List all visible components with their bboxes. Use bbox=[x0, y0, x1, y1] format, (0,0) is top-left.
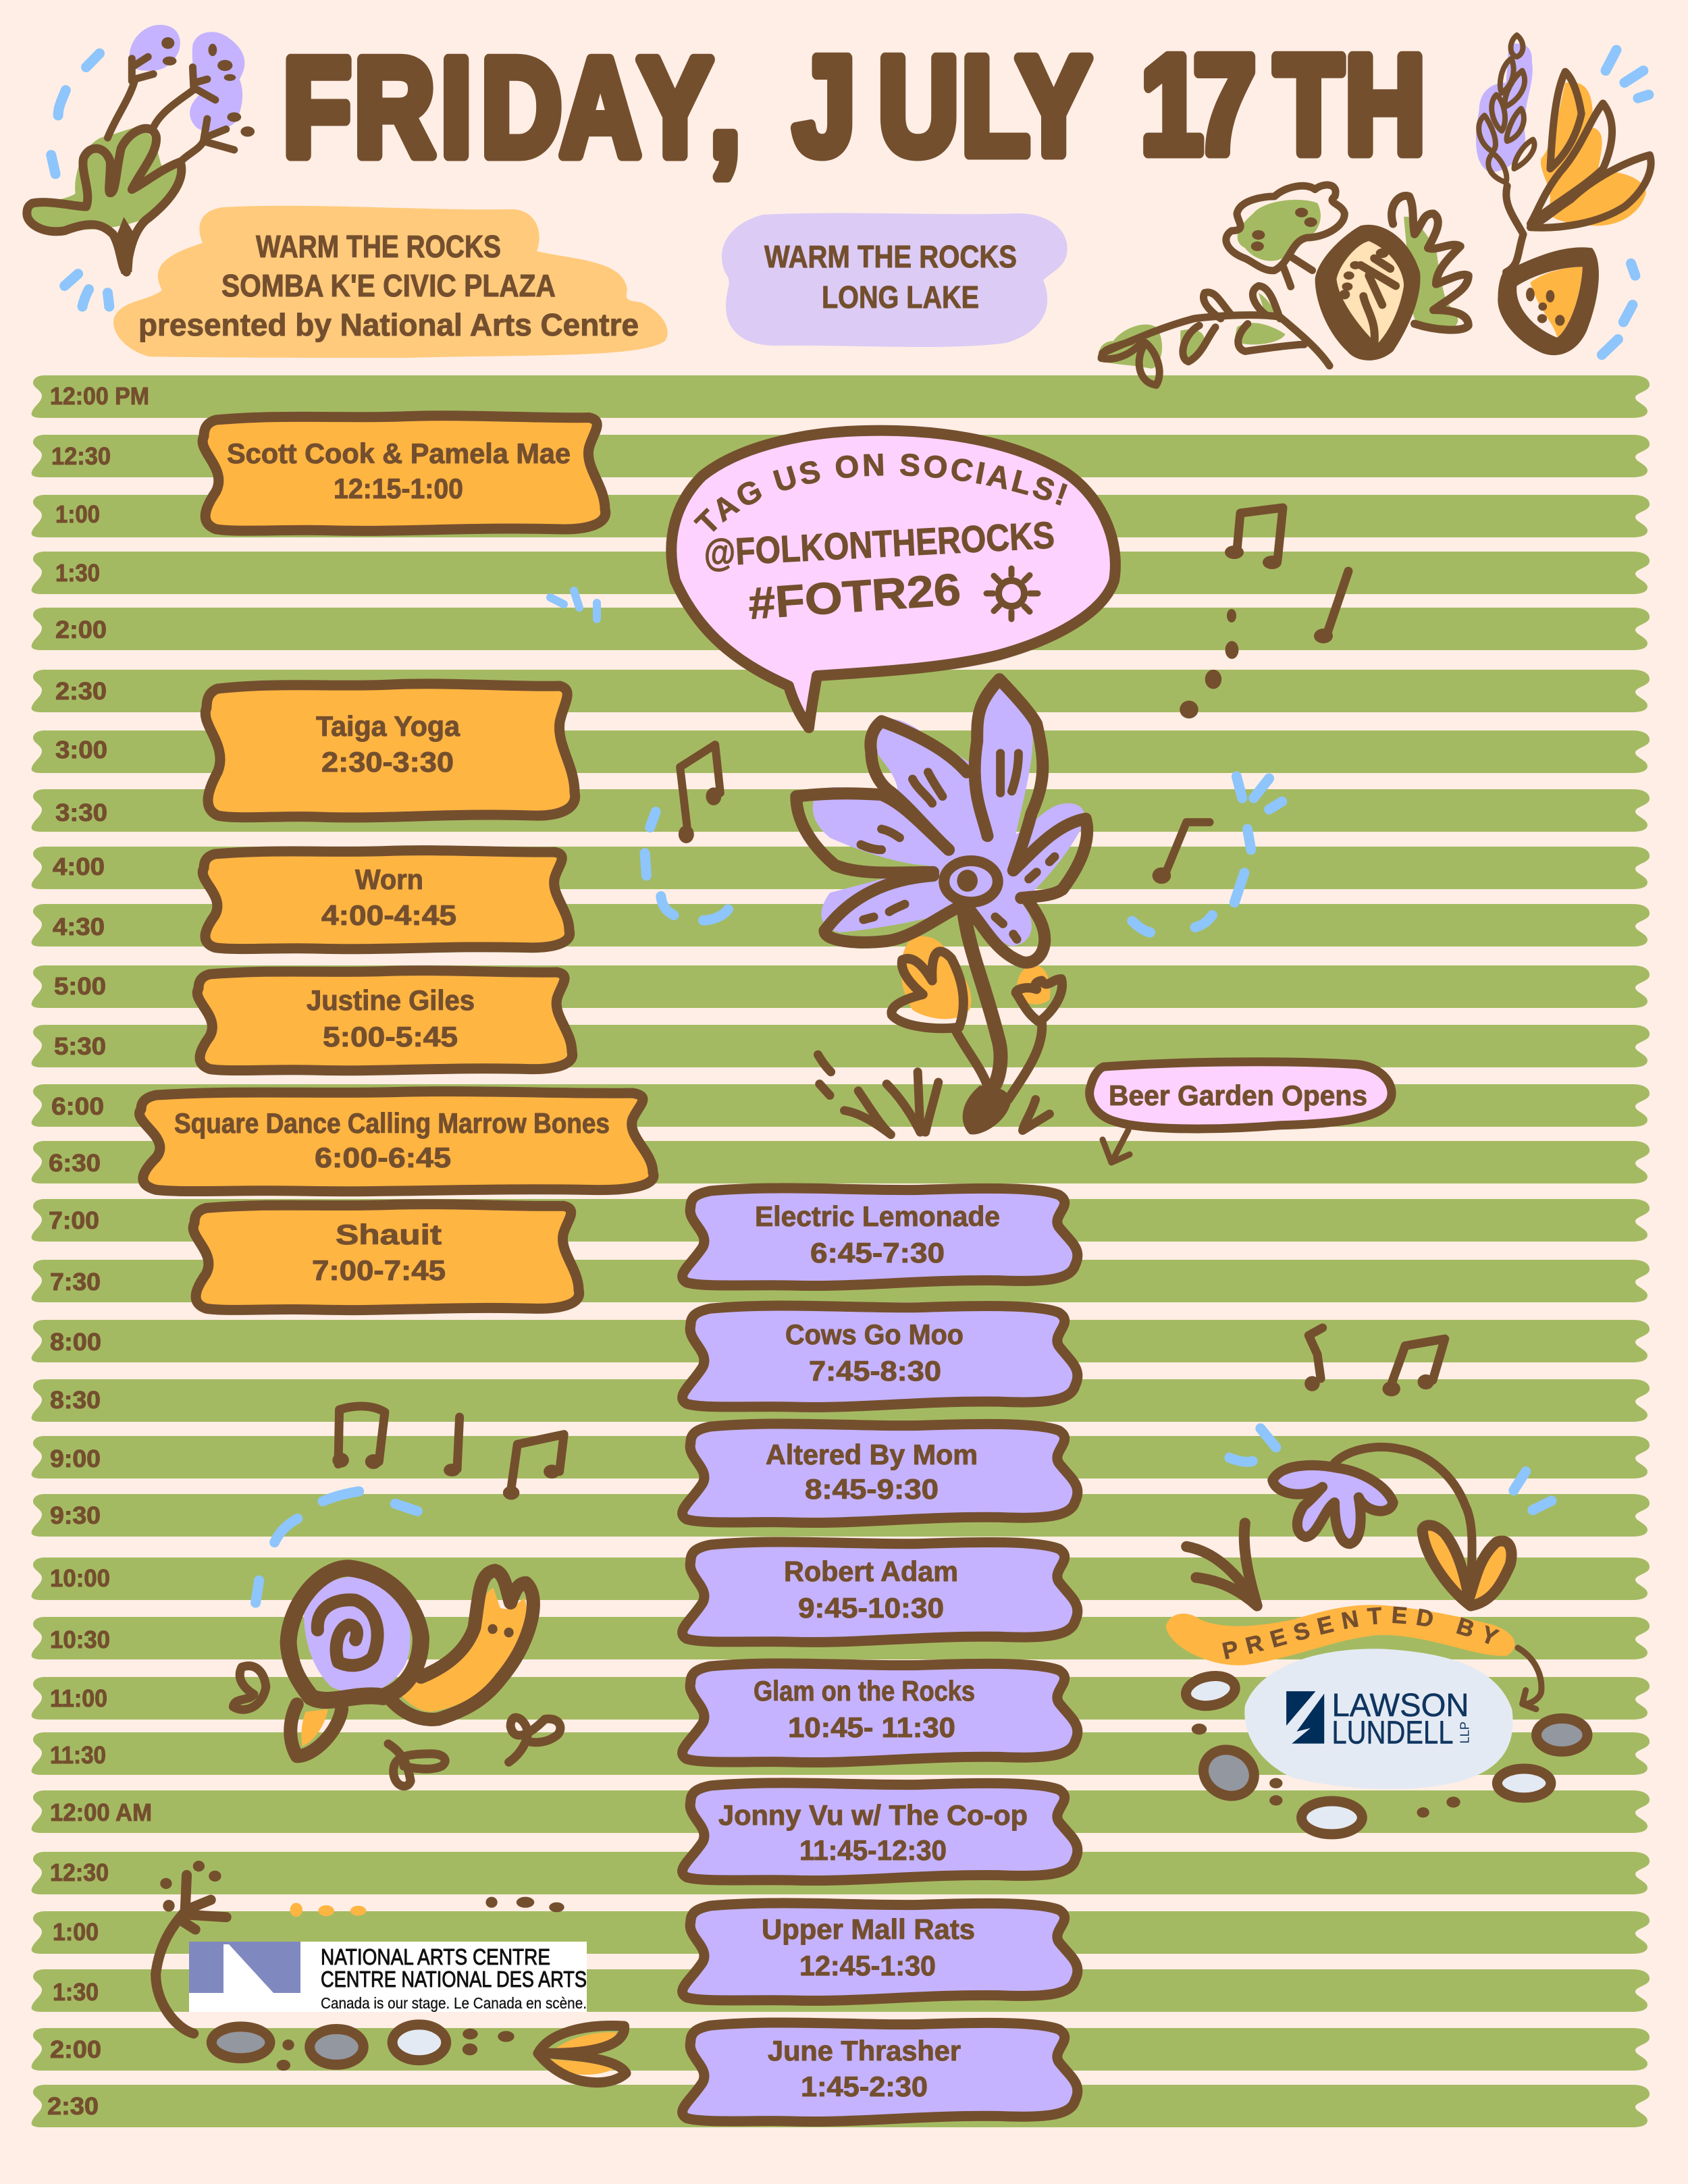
time axis labels: 8:00 bbox=[50, 1328, 101, 1356]
event: Electric Lemonade: 6:45-7:30 bbox=[810, 1237, 945, 1269]
icon: blue sparkle near bubble bbox=[550, 591, 597, 619]
time axis labels: 4:00 bbox=[53, 853, 105, 880]
event: Cows Go Moo: 7:45-8:30 bbox=[809, 1355, 941, 1387]
time axis labels: 5:00 bbox=[54, 972, 106, 1000]
event: Taiga Yoga: 2:30-3:30 bbox=[321, 746, 454, 778]
logo: Lawson Lundell presented by bbox=[1165, 1605, 1592, 1839]
time axis labels: 12:00 PM bbox=[50, 382, 149, 410]
logo: National Arts Centre: NATIONAL ARTS CENTRE bbox=[321, 1944, 550, 1969]
event: June Thrasher: June Thrasher bbox=[768, 2035, 961, 2067]
icon: music notes upper right bbox=[1225, 508, 1348, 643]
time axis labels: 10:00 bbox=[50, 1564, 110, 1592]
panel: Long Lake stage heading: WARM THE ROCKS bbox=[764, 239, 1017, 274]
schedule stripes background bbox=[32, 375, 1650, 2127]
time axis labels: 2:00 bbox=[50, 2035, 101, 2063]
time axis labels: 11:00 bbox=[50, 1684, 107, 1712]
sponsor decoration: branch, stones, leaf bbox=[156, 1861, 626, 2083]
logo: National Arts Centre: Canada is our stage. Le Canada en scène. bbox=[321, 1994, 587, 2012]
callout: social media speech bubble: #FOTR26 bbox=[747, 564, 962, 629]
event: Upper Mall Rats: Upper Mall Rats bbox=[762, 1913, 975, 1945]
time axis labels: 1:00 bbox=[55, 500, 100, 528]
icon: sun bbox=[986, 568, 1038, 619]
time axis labels: 3:00 bbox=[55, 736, 107, 764]
time axis labels: 8:30 bbox=[50, 1386, 101, 1414]
event: Scott Cook & Pamela Mae: 12:15-1:00 bbox=[334, 473, 463, 504]
event: Shauit: 7:00-7:45 bbox=[312, 1254, 446, 1286]
event: Justine Giles: Justine Giles bbox=[307, 984, 475, 1016]
event: Taiga Yoga: Taiga Yoga bbox=[316, 710, 460, 742]
panel: Somba K'e stage heading bbox=[113, 206, 668, 358]
event: Glam on the Rocks bbox=[683, 1663, 1078, 1762]
event: Worn: Worn bbox=[355, 863, 423, 895]
time axis labels: 1:30 bbox=[53, 1978, 99, 2006]
panel: Long Lake stage heading: LONG LAKE bbox=[822, 279, 979, 315]
event: Glam on the Rocks: Glam on the Rocks bbox=[754, 1675, 975, 1707]
callout: social media speech bubble: @FOLKONTHEROCKS bbox=[703, 513, 1055, 575]
time axis labels: 10:30 bbox=[50, 1626, 110, 1653]
event: Altered By Mom: 8:45-9:30 bbox=[805, 1473, 939, 1505]
event: Glam on the Rocks: 10:45- 11:30 bbox=[788, 1711, 955, 1743]
title: JULY bbox=[793, 28, 1091, 184]
title: FRIDAY, bbox=[283, 29, 741, 185]
event: Electric Lemonade bbox=[683, 1188, 1078, 1286]
event: Upper Mall Rats: 12:45-1:30 bbox=[799, 1950, 936, 1981]
time axis labels: 11:30 bbox=[50, 1741, 106, 1769]
event: June Thrasher: 1:45-2:30 bbox=[801, 2071, 928, 2102]
time axis labels: 12:30 bbox=[51, 442, 111, 470]
event: June Thrasher bbox=[683, 2023, 1078, 2121]
event: Shauit: Shauit bbox=[336, 1219, 442, 1250]
time axis labels: 6:00 bbox=[51, 1092, 104, 1120]
time axis labels: 2:00 bbox=[55, 616, 107, 643]
icon: drooping flower, arrows and music notes bbox=[1186, 1328, 1552, 1606]
event: Robert Adam bbox=[683, 1542, 1078, 1642]
time axis labels: 1:00 bbox=[53, 1918, 99, 1946]
callout: Beer Garden Opens bbox=[1090, 1062, 1392, 1163]
event: Cows Go Moo: Cows Go Moo bbox=[785, 1319, 964, 1350]
icon: main lilac flower with music notes bbox=[645, 641, 1282, 1135]
time axis labels: 6:30 bbox=[49, 1149, 101, 1177]
panel: Somba K'e stage heading: WARM THE ROCKS bbox=[256, 229, 501, 264]
time axis labels: 9:30 bbox=[50, 1501, 101, 1529]
event: Worn: 4:00-4:45 bbox=[321, 899, 456, 931]
event: Square Dance Calling Marrow Bones bbox=[140, 1092, 654, 1192]
logo: Lawson Lundell presented by: LUNDELL bbox=[1331, 1715, 1454, 1751]
event: Robert Adam: 9:45-10:30 bbox=[798, 1592, 944, 1624]
time axis labels: 7:30 bbox=[50, 1268, 101, 1296]
event: Altered By Mom: Altered By Mom bbox=[766, 1439, 978, 1470]
title bbox=[283, 26, 1425, 185]
time axis labels: 9:00 bbox=[50, 1445, 101, 1472]
event: Altered By Mom bbox=[683, 1424, 1078, 1522]
event: Square Dance Calling Marrow Bones: 6:00-6:45 bbox=[315, 1142, 451, 1173]
event: Worn bbox=[203, 851, 570, 949]
time axis labels: 12:00 AM bbox=[50, 1799, 152, 1826]
event: Jonny Vu w/ The Co-op bbox=[683, 1783, 1078, 1881]
logo: Lawson Lundell presented by: PRESENTED BY bbox=[1222, 1607, 1500, 1659]
event: Robert Adam: Robert Adam bbox=[784, 1555, 958, 1587]
event: Scott Cook & Pamela Mae bbox=[203, 416, 606, 531]
time axis labels: 5:30 bbox=[54, 1032, 106, 1060]
event: Justine Giles bbox=[197, 971, 573, 1071]
panel: Somba K'e stage heading: presented by National Arts Centre bbox=[138, 307, 639, 342]
time axis labels: 12:30 bbox=[50, 1859, 109, 1886]
event: Square Dance Calling Marrow Bones: Square Dance Calling Marrow Bones bbox=[174, 1107, 610, 1139]
event: Upper Mall Rats bbox=[683, 1903, 1078, 2001]
logo: Lawson Lundell presented by: LAWSON bbox=[1331, 1687, 1469, 1724]
icon: left header plant bbox=[27, 25, 255, 307]
time axis labels: 4:30 bbox=[53, 913, 105, 940]
logo: Lawson Lundell presented by: LLP bbox=[1458, 1722, 1472, 1744]
time axis labels: 7:00 bbox=[49, 1206, 99, 1234]
icon: header leaves and seed pod bbox=[1099, 185, 1469, 385]
callout: social media speech bubble bbox=[666, 425, 1121, 733]
callout: Beer Garden Opens: Beer Garden Opens bbox=[1109, 1080, 1367, 1111]
event: Taiga Yoga bbox=[205, 684, 575, 818]
callout: social media speech bubble: TAG US ON SOCIALS! bbox=[693, 454, 1067, 532]
icon: right header lupine and tulip bbox=[1476, 35, 1651, 355]
event: Justine Giles: 5:00-5:45 bbox=[323, 1021, 458, 1053]
event: Electric Lemonade: Electric Lemonade bbox=[755, 1200, 1000, 1232]
event: Cows Go Moo bbox=[683, 1306, 1078, 1407]
icon: snail with music notes bbox=[233, 1406, 564, 1786]
time axis labels: 2:30 bbox=[47, 2092, 99, 2120]
time axis labels: 1:30 bbox=[55, 559, 100, 587]
event: Jonny Vu w/ The Co-op: Jonny Vu w/ The Co-op bbox=[718, 1799, 1028, 1831]
event: Shauit bbox=[193, 1204, 579, 1310]
time axis labels bbox=[47, 382, 152, 2120]
logo: National Arts Centre: CENTRE NATIONAL DES ARTS bbox=[321, 1967, 587, 1992]
panel: Long Lake stage heading bbox=[722, 213, 1067, 347]
panel: Somba K'e stage heading: SOMBA K'E CIVIC PLAZA bbox=[221, 268, 556, 303]
logo: National Arts Centre bbox=[189, 1942, 587, 2012]
time axis labels: 3:30 bbox=[55, 799, 107, 826]
time axis labels: 2:30 bbox=[55, 677, 107, 705]
title: 17TH bbox=[1141, 26, 1425, 182]
event: Scott Cook & Pamela Mae: Scott Cook & Pamela Mae bbox=[227, 437, 571, 469]
event: Jonny Vu w/ The Co-op: 11:45-12:30 bbox=[799, 1834, 947, 1866]
